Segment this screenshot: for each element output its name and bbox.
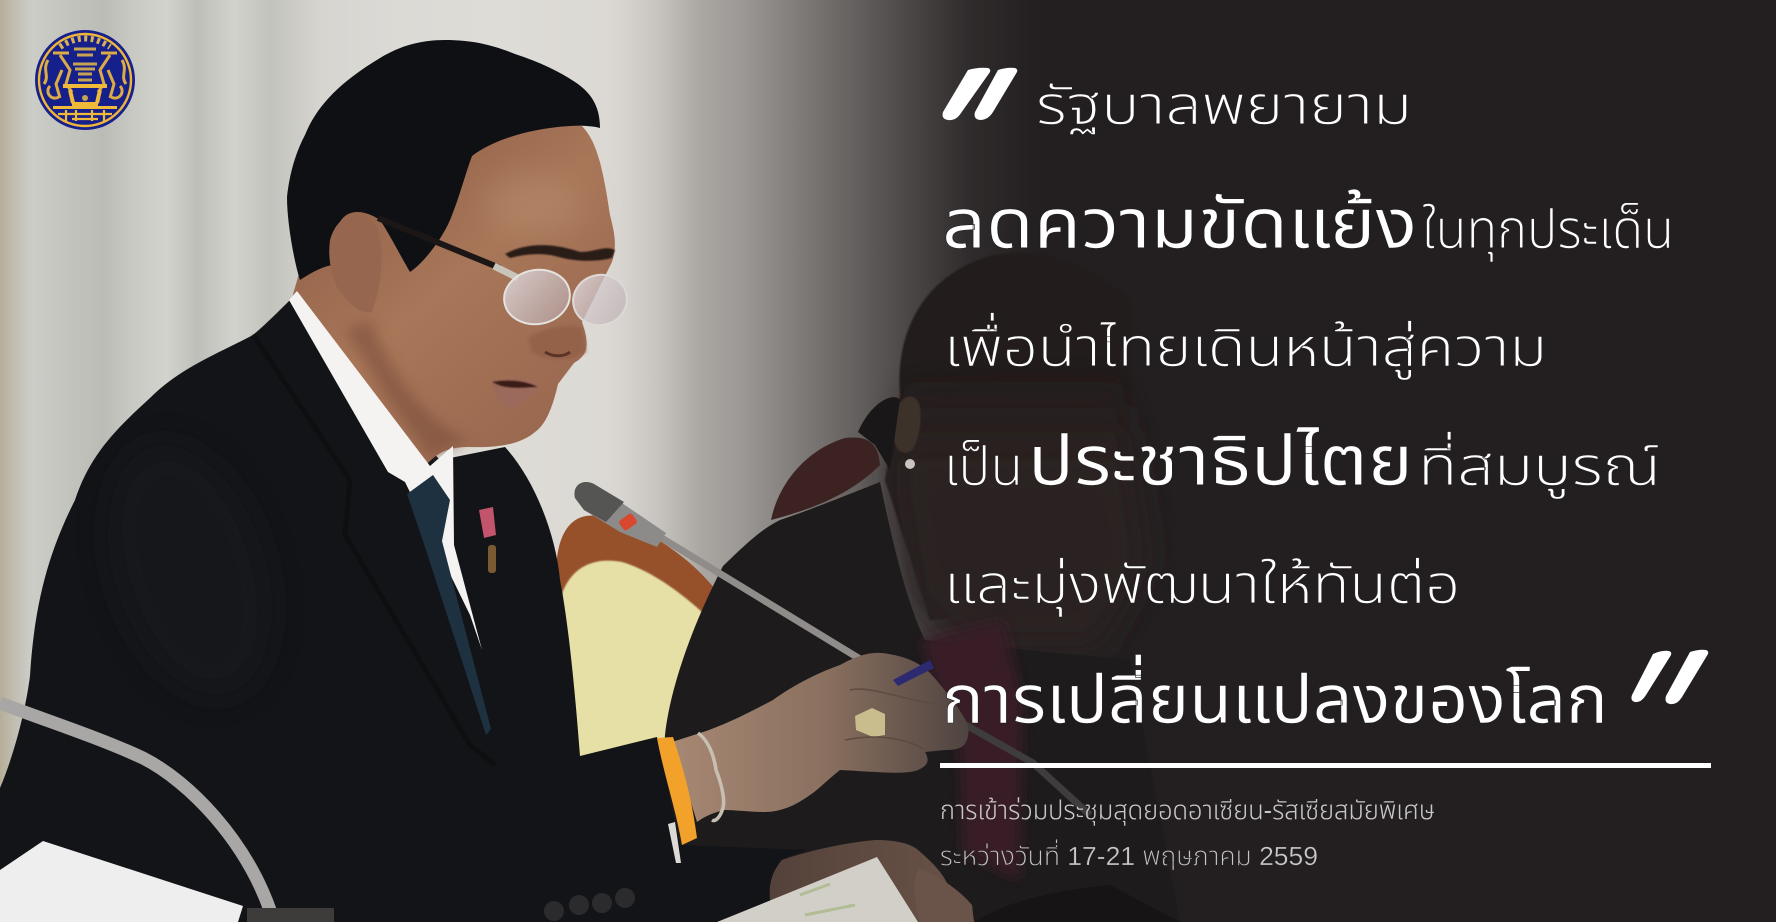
woman ear <box>893 397 921 453</box>
woman pink scarf <box>920 620 1023 880</box>
line 3: เพื่อนำไทยเดินหน้าสู่ความ <box>944 312 1547 380</box>
woman body <box>640 482 1180 922</box>
lower motifs <box>58 110 112 121</box>
suit sleeve highlight <box>78 423 302 717</box>
silver bracelet <box>698 733 724 820</box>
microphone on desk <box>574 482 1090 815</box>
lapel line <box>253 335 495 765</box>
mic head <box>574 482 666 547</box>
suit jacket <box>0 300 807 922</box>
notes paper <box>717 857 918 922</box>
temple arm <box>378 218 500 268</box>
ring <box>855 708 885 737</box>
neck and face <box>292 118 615 464</box>
hand <box>770 840 974 922</box>
woman earring <box>905 459 915 469</box>
caption line 2: ระหว่างวันที่ 17-21 พฤษภาคม 2559 <box>940 839 1318 871</box>
glasses <box>378 218 633 331</box>
offering bowl <box>73 49 97 80</box>
chair wooden frame <box>556 516 716 640</box>
pedestal jewel <box>82 95 88 101</box>
suit buttons <box>544 888 635 921</box>
line 4 emphasis: ประชาธิปไตย <box>1028 422 1413 500</box>
woman red collar <box>771 438 880 520</box>
left lens <box>500 265 574 329</box>
jaw shadow <box>345 320 470 458</box>
right lens <box>567 269 633 331</box>
nostril <box>545 352 570 356</box>
background woman silhouette <box>640 253 1180 922</box>
man in suit <box>0 40 807 922</box>
woman hair <box>885 253 1130 620</box>
gold ring <box>39 34 131 126</box>
mic stem <box>660 537 860 659</box>
upper hand holding pen <box>657 653 969 863</box>
line 4 start: เป็น <box>944 437 1023 497</box>
caption line 1: การเข้าร่วมประชุมสุดยอดอาเซียน-รัสเซียสมัยพิเศษ <box>940 795 1435 827</box>
woman face <box>890 370 1150 650</box>
divider rule <box>940 763 1711 768</box>
hand <box>672 653 969 822</box>
opening quote mark <box>943 68 1017 120</box>
pen <box>893 660 934 686</box>
mouth <box>492 379 540 408</box>
shirt cuff <box>668 822 681 863</box>
base <box>247 908 334 922</box>
ear <box>329 215 382 313</box>
tie <box>407 475 491 735</box>
lower band <box>53 106 117 109</box>
line 2 emphasis: ลดความขัดแย้ง <box>942 185 1417 263</box>
foreground paper <box>0 841 243 922</box>
quote text block <box>942 68 1708 738</box>
pedestal <box>63 86 107 104</box>
line 2 regular: ในทุกประเด็น <box>1422 200 1674 262</box>
flame border <box>60 38 110 47</box>
foreground microphone <box>0 703 334 922</box>
highlighted lines <box>800 884 855 915</box>
chair cushion <box>560 561 702 760</box>
chair <box>556 516 716 760</box>
hair <box>287 40 600 280</box>
lapel pins <box>479 507 496 573</box>
finger lines <box>845 689 945 750</box>
thumb <box>915 868 974 922</box>
government seal logo <box>35 30 135 130</box>
woman hair bun <box>858 397 900 470</box>
stem <box>0 703 270 910</box>
eyebrow <box>505 245 615 261</box>
forehead highlight <box>485 175 585 235</box>
table edge dark arc <box>975 885 1180 922</box>
line 5: และมุ่งพัฒนาให้ทันต่อ <box>944 555 1460 617</box>
mic red light <box>618 512 638 532</box>
dark gradient panel <box>620 0 1776 922</box>
outer disc <box>35 30 135 130</box>
right guardian lion <box>98 53 126 98</box>
nose shadow <box>528 326 586 360</box>
line 1: รัฐบาลพยายาม <box>1036 76 1412 136</box>
closing quote mark <box>1631 650 1708 704</box>
line 4 end: ที่สมบูรณ์ <box>1418 431 1661 499</box>
shirt collar <box>289 291 482 650</box>
lower hand with notes <box>717 840 974 922</box>
line 6 emphasis: การเปลี่ยนแปลงของโลก <box>942 654 1608 738</box>
wrist band <box>657 737 697 845</box>
caption <box>940 795 1435 871</box>
left guardian lion <box>44 53 72 98</box>
